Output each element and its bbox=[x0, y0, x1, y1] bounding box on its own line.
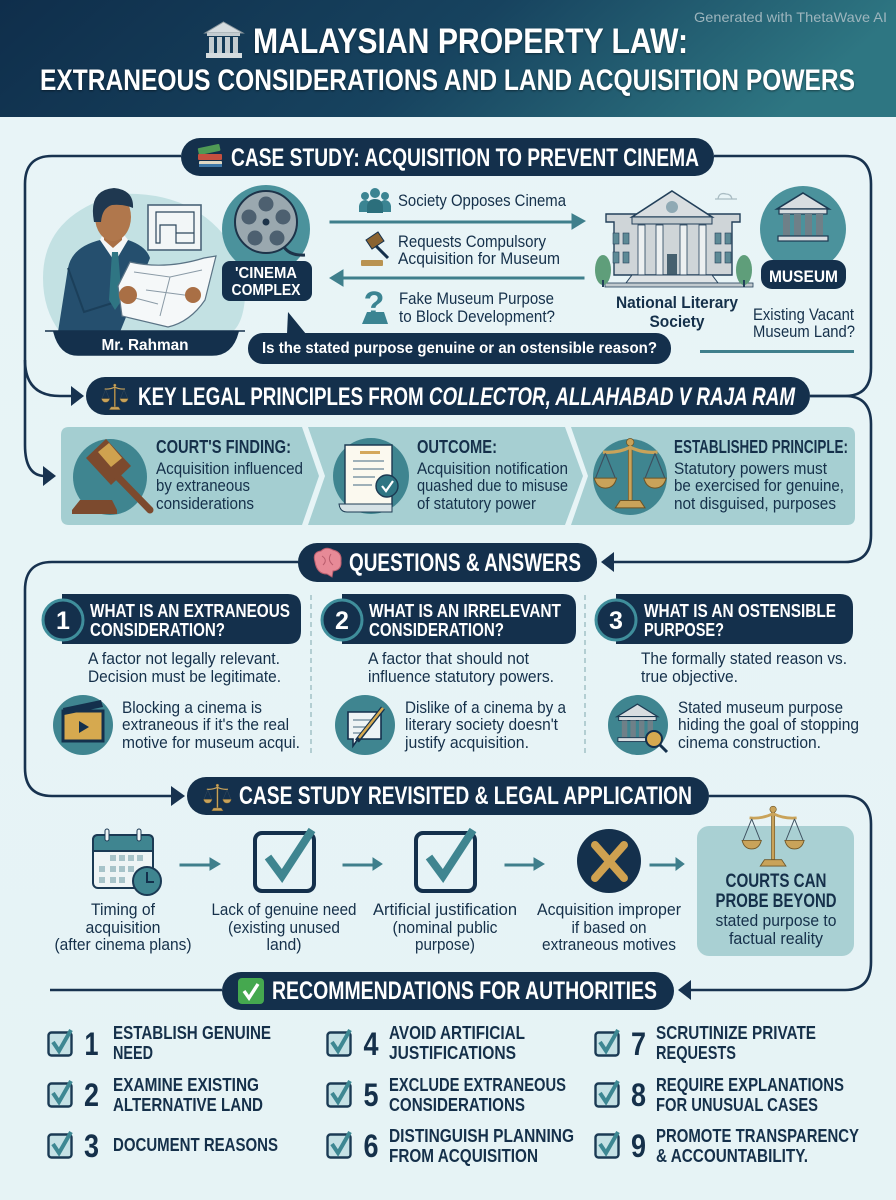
dividers bbox=[311, 595, 585, 755]
icon: brain bbox=[314, 548, 341, 577]
panel: case study bbox=[43, 185, 855, 364]
name plate bbox=[45, 331, 245, 355]
text: example 2 bbox=[404, 698, 566, 752]
text: outcome: of statutory power bbox=[417, 494, 536, 513]
text: example 1: extraneous if it's the real bbox=[122, 715, 289, 734]
heading: question 3: WHAT IS AN OSTENSIBLE bbox=[644, 601, 836, 621]
label: national literary society: Society bbox=[650, 313, 705, 331]
text: timing: (after cinema plans) bbox=[54, 935, 192, 954]
label: national literary society bbox=[616, 294, 739, 331]
text: answer 2: A factor that should not bbox=[368, 649, 529, 668]
text: lack of need: Lack of genuine need bbox=[212, 900, 356, 919]
callout: courts can probe beyond: factual reality bbox=[729, 929, 823, 948]
icon: classical building bbox=[205, 22, 243, 58]
recommendation 1: 1 bbox=[84, 1026, 98, 1062]
section heading: case study revisited: CASE STUDY REVISITED & LEGAL APPLICATION bbox=[239, 782, 692, 810]
heading: question 2: 2 bbox=[335, 607, 349, 635]
text: vacant land: Museum Land? bbox=[753, 322, 855, 341]
section heading: case study revisited bbox=[187, 777, 709, 815]
text: fake purpose bbox=[399, 289, 555, 326]
arrow bbox=[505, 858, 544, 870]
heading: question 1 bbox=[43, 594, 301, 644]
panel: legal application flow bbox=[54, 806, 854, 956]
text: example 1: motive for museum acqui. bbox=[122, 733, 300, 752]
recommendation 6 bbox=[328, 1126, 574, 1166]
text: answer 2 bbox=[368, 649, 554, 686]
icon: cinema reel bbox=[222, 185, 310, 273]
recommendation 2 bbox=[48, 1075, 263, 1115]
recommendation 4: JUSTIFICATIONS bbox=[389, 1043, 516, 1063]
recommendation 9 bbox=[596, 1126, 859, 1166]
panel: question 1 bbox=[43, 594, 301, 755]
icon: museum bbox=[760, 186, 846, 272]
icon: checkbox bbox=[416, 830, 475, 891]
recommendation 6: DISTINGUISH PLANNING bbox=[389, 1126, 574, 1146]
recommendation 1: ESTABLISH GENUINE bbox=[113, 1023, 271, 1043]
text: example 2: literary society doesn't bbox=[405, 715, 558, 734]
recommendation 4 bbox=[328, 1023, 525, 1063]
arrow bbox=[343, 858, 382, 870]
recommendation 3: 3 bbox=[84, 1128, 99, 1164]
recommendation 5 bbox=[328, 1075, 566, 1115]
text: answer 1 bbox=[88, 649, 281, 686]
recommendation 9: 9 bbox=[631, 1128, 646, 1164]
icon: calendar bbox=[93, 829, 161, 895]
heading: question 1: CONSIDERATION? bbox=[90, 620, 225, 640]
icon: green check bbox=[238, 978, 264, 1004]
step: improper acquisition bbox=[537, 829, 681, 954]
panel: court's finding bbox=[61, 427, 319, 525]
text: example 1: Blocking a cinema is bbox=[122, 698, 262, 717]
section heading: recommendations bbox=[222, 972, 674, 1010]
text: timing: acquisition bbox=[86, 918, 160, 937]
text: answer 3: The formally stated reason vs. bbox=[641, 649, 847, 668]
text: fake purpose: to Block Development? bbox=[399, 307, 555, 326]
heading: question 3 bbox=[596, 594, 853, 644]
text: society opposes: Society Opposes Cinema bbox=[398, 191, 566, 210]
panel: outcome bbox=[308, 427, 583, 525]
heading: question 2: WHAT IS AN IRRELEVANT bbox=[369, 601, 561, 621]
callout: courts can probe beyond: COURTS CAN bbox=[726, 871, 826, 892]
text: answer 3 bbox=[641, 649, 847, 686]
text: requests acquisition bbox=[398, 232, 560, 268]
text: outcome: quashed due to misuse bbox=[417, 476, 568, 495]
heading: question 2 bbox=[322, 594, 576, 644]
text: vacant land bbox=[700, 305, 855, 353]
text: artificial justification bbox=[373, 900, 517, 954]
recommendation 9: & ACCOUNTABILITY. bbox=[656, 1146, 808, 1166]
text: established principle: be exercised for genuine, bbox=[674, 476, 844, 495]
recommendation 5: CONSIDERATIONS bbox=[389, 1095, 525, 1115]
icon: museum with magnifier bbox=[608, 695, 668, 755]
text: established principle: Statutory powers must bbox=[674, 459, 827, 478]
section heading: key legal principles bbox=[86, 377, 810, 415]
name plate: Mr. Rahman bbox=[102, 337, 188, 354]
text: fake purpose: Fake Museum Purpose bbox=[399, 289, 554, 308]
callout: genuine or ostensible bbox=[248, 312, 671, 364]
icon: gavel bbox=[72, 439, 150, 514]
callout: courts can probe beyond bbox=[697, 806, 854, 956]
icon: scales bbox=[101, 384, 128, 410]
label: museum bbox=[761, 260, 846, 289]
recommendation 3: DOCUMENT REASONS bbox=[113, 1135, 278, 1155]
recommendation 8 bbox=[596, 1075, 844, 1115]
text: improper acquisition: if based on bbox=[572, 918, 646, 937]
recommendation 1: NEED bbox=[113, 1043, 153, 1063]
recommendation 8: REQUIRE EXPLANATIONS bbox=[656, 1075, 844, 1095]
text: court's finding: by extraneous bbox=[156, 476, 250, 495]
text: lack of need: (existing unused bbox=[228, 918, 340, 937]
recommendation 2: ALTERNATIVE LAND bbox=[113, 1095, 263, 1115]
text: improper acquisition bbox=[537, 900, 681, 954]
title text: MALAYSIAN PROPERTY LAW: bbox=[253, 22, 688, 61]
text: example 3: Stated museum purpose bbox=[678, 698, 843, 717]
text: outcome: Acquisition notification bbox=[417, 459, 568, 478]
icon: clapperboard bbox=[53, 695, 113, 755]
recommendation 7: REQUESTS bbox=[656, 1043, 736, 1063]
section heading: questions and answers: QUESTIONS & ANSWERS bbox=[349, 549, 581, 577]
panel: established principle bbox=[571, 427, 855, 525]
step: timing bbox=[54, 829, 192, 954]
text: timing bbox=[54, 900, 192, 954]
recommendation 7: SCRUTINIZE PRIVATE bbox=[656, 1023, 816, 1043]
icon: checkbox bbox=[255, 830, 314, 891]
text: example 3 bbox=[678, 698, 859, 752]
icon: x mark bbox=[577, 829, 641, 893]
text: requests acquisition: Requests Compulsory bbox=[398, 232, 546, 251]
callout: genuine or ostensible: Is the stated purpose genuine or an ostensible reason? bbox=[262, 340, 657, 357]
text: requests acquisition: Acquisition for Museum bbox=[398, 249, 560, 268]
icon: document bbox=[339, 445, 398, 512]
recommendation 6: FROM ACQUISITION bbox=[389, 1146, 538, 1166]
text: court's finding: considerations bbox=[156, 494, 254, 513]
recommendation 3 bbox=[48, 1128, 278, 1164]
recommendation 6: 6 bbox=[364, 1128, 378, 1164]
text: court's finding bbox=[156, 437, 303, 513]
panel: recommendations list bbox=[48, 1023, 859, 1166]
heading: question 3: PURPOSE? bbox=[644, 620, 724, 640]
recommendation 2: 2 bbox=[84, 1077, 99, 1113]
section heading: recommendations: RECOMMENDATIONS FOR AUTHORITIES bbox=[272, 977, 657, 1005]
watermark: Generated with ThetaWave AI bbox=[694, 9, 887, 25]
icon: scales bbox=[742, 806, 804, 866]
text: outcome: OUTCOME: bbox=[417, 437, 497, 457]
text: established principle: not disguised, purposes bbox=[674, 494, 836, 513]
heading: question 3: 3 bbox=[609, 607, 623, 635]
text: lack of need: land) bbox=[266, 935, 302, 954]
section heading: case study: CASE STUDY: ACQUISITION TO PREVENT CINEMA bbox=[231, 144, 699, 172]
heading: question 2: CONSIDERATION? bbox=[369, 620, 504, 640]
text: artificial justification: Artificial justification bbox=[373, 900, 517, 919]
text: answer 1: A factor not legally relevant. bbox=[88, 649, 280, 668]
arrow bbox=[650, 858, 684, 870]
title text bbox=[40, 22, 855, 97]
text: answer 3: true objective. bbox=[641, 667, 738, 686]
cinema label: 'CINEMA bbox=[235, 265, 297, 282]
text: court's finding: COURT'S FINDING: bbox=[156, 437, 291, 457]
icon: scales bbox=[203, 784, 231, 811]
step: artificial justification bbox=[373, 830, 517, 954]
recommendation 8: 8 bbox=[631, 1077, 646, 1113]
icon: gavel bbox=[361, 232, 388, 266]
recommendation 4: 4 bbox=[364, 1026, 379, 1062]
step: lack of need bbox=[212, 830, 356, 954]
recommendation 5: 5 bbox=[364, 1077, 378, 1113]
recommendation 9: PROMOTE TRANSPARENCY bbox=[656, 1126, 859, 1146]
figure: Mr. Rahman with plans bbox=[43, 188, 245, 355]
text: improper acquisition: extraneous motives bbox=[542, 935, 676, 954]
callout: courts can probe beyond: stated purpose to bbox=[716, 911, 836, 930]
icon: books bbox=[198, 144, 222, 167]
recommendation 7: 7 bbox=[631, 1026, 646, 1062]
text: timing: Timing of bbox=[91, 900, 155, 919]
arrow: to society bbox=[330, 214, 585, 229]
label: national literary society: National Literary bbox=[616, 294, 739, 312]
section heading: case study bbox=[181, 138, 714, 176]
recommendation 7 bbox=[596, 1023, 816, 1063]
recommendation 2: EXAMINE EXISTING bbox=[113, 1075, 259, 1095]
text: lack of need bbox=[212, 900, 356, 954]
panel: question 3 bbox=[596, 594, 859, 755]
recommendation 5: EXCLUDE EXTRANEOUS bbox=[389, 1075, 566, 1095]
text: example 3: cinema construction. bbox=[678, 733, 821, 752]
icon: national literary society building bbox=[595, 191, 753, 287]
text: answer 2: influence statutory powers. bbox=[368, 667, 554, 686]
text: artificial justification: purpose) bbox=[415, 935, 475, 954]
section heading: key legal principles: KEY LEGAL PRINCIPLES FROM COLLECTOR, ALLAHABAD V RAJA RAM bbox=[138, 383, 796, 411]
text: example 2: Dislike of a cinema by a bbox=[405, 698, 566, 717]
text: outcome bbox=[417, 437, 568, 513]
recommendation 1 bbox=[48, 1023, 271, 1063]
icon: scales bbox=[594, 438, 666, 508]
text: court's finding: Acquisition influenced bbox=[156, 459, 303, 478]
title banner bbox=[0, 0, 896, 117]
text: answer 1: Decision must be legitimate. bbox=[88, 667, 281, 686]
panel: question 2 bbox=[322, 594, 576, 755]
arrow: back to cinema bbox=[330, 270, 584, 286]
cinema label bbox=[222, 261, 312, 301]
icon: society people bbox=[359, 188, 391, 213]
recommendation 8: FOR UNUSUAL CASES bbox=[656, 1095, 818, 1115]
text: vacant land: Existing Vacant bbox=[753, 305, 854, 324]
callout: courts can probe beyond: PROBE BEYOND bbox=[716, 891, 836, 912]
text: improper acquisition: Acquisition improper bbox=[537, 900, 681, 919]
label: museum: MUSEUM bbox=[769, 267, 838, 286]
text: artificial justification: (nominal public bbox=[392, 918, 498, 937]
panel: legal principles band bbox=[61, 427, 855, 525]
text: example 1 bbox=[122, 698, 300, 752]
arrow bbox=[180, 858, 220, 870]
icon: question mark: ? bbox=[364, 285, 384, 323]
icon: pen and note bbox=[335, 695, 395, 755]
cinema label: COMPLEX bbox=[232, 282, 301, 299]
text: established principle bbox=[674, 437, 848, 513]
heading: question 1: WHAT IS AN EXTRANEOUS bbox=[90, 601, 290, 621]
text: example 3: hiding the goal of stopping bbox=[678, 715, 859, 734]
section heading: questions and answers bbox=[298, 543, 597, 582]
text: example 2: justify acquisition. bbox=[404, 733, 529, 752]
recommendation 4: AVOID ARTIFICIAL bbox=[389, 1023, 525, 1043]
heading: question 1: 1 bbox=[56, 607, 70, 635]
flow connector: outer lines bbox=[25, 156, 871, 1000]
